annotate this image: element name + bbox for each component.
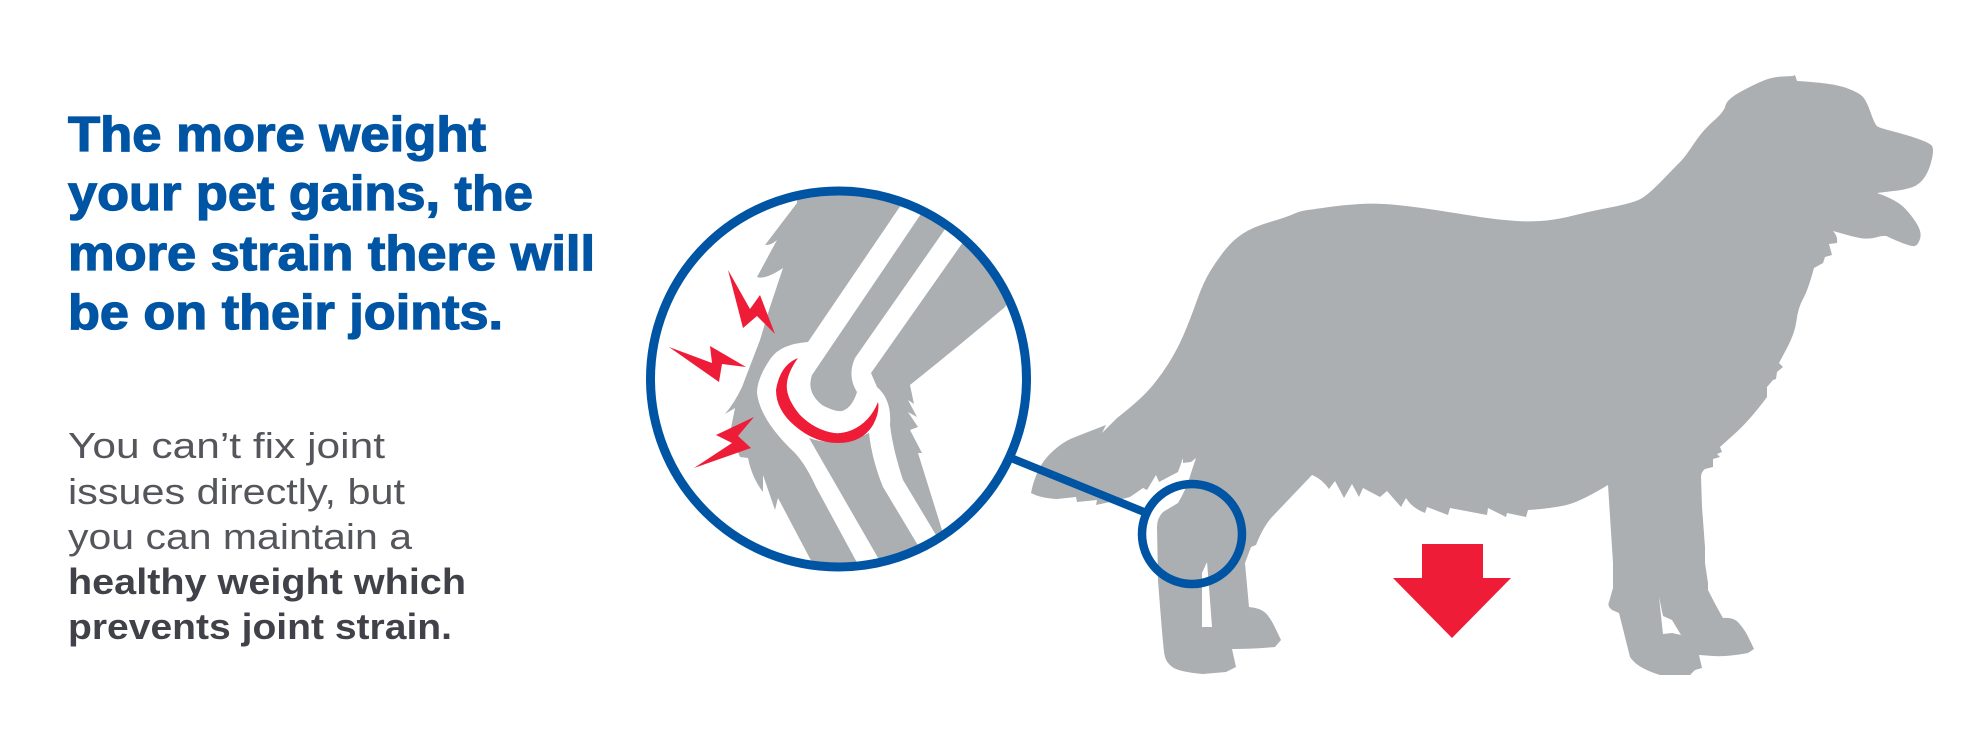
red cartilage crescent xyxy=(776,358,878,443)
heading: be on their joints. xyxy=(68,286,503,340)
magnified knee joint xyxy=(725,196,1006,562)
leg fur shape xyxy=(725,196,1006,562)
body text: you can maintain a xyxy=(68,516,413,557)
pain bolt top xyxy=(728,270,775,334)
red down arrow xyxy=(1393,544,1511,638)
pain bolt middle xyxy=(669,346,746,382)
upper bone xyxy=(810,205,950,411)
body text: healthy weight which xyxy=(68,561,466,602)
magnifier lens ring xyxy=(650,191,1026,567)
heading: The more weight xyxy=(68,108,486,162)
heading: more strain there will xyxy=(68,227,595,281)
connector line xyxy=(1011,458,1144,512)
dog silhouette xyxy=(1031,75,1933,675)
body text: issues directly, but xyxy=(68,471,405,512)
lower bone xyxy=(809,433,918,558)
body text: prevents joint strain. xyxy=(68,606,452,647)
small joint ring xyxy=(1142,484,1242,584)
body text xyxy=(68,425,466,647)
pain bolt bottom xyxy=(694,417,754,468)
heading xyxy=(68,108,595,340)
white joint outline xyxy=(757,205,968,570)
heading: your pet gains, the xyxy=(68,167,533,221)
body text: You can’t fix joint xyxy=(68,425,385,466)
